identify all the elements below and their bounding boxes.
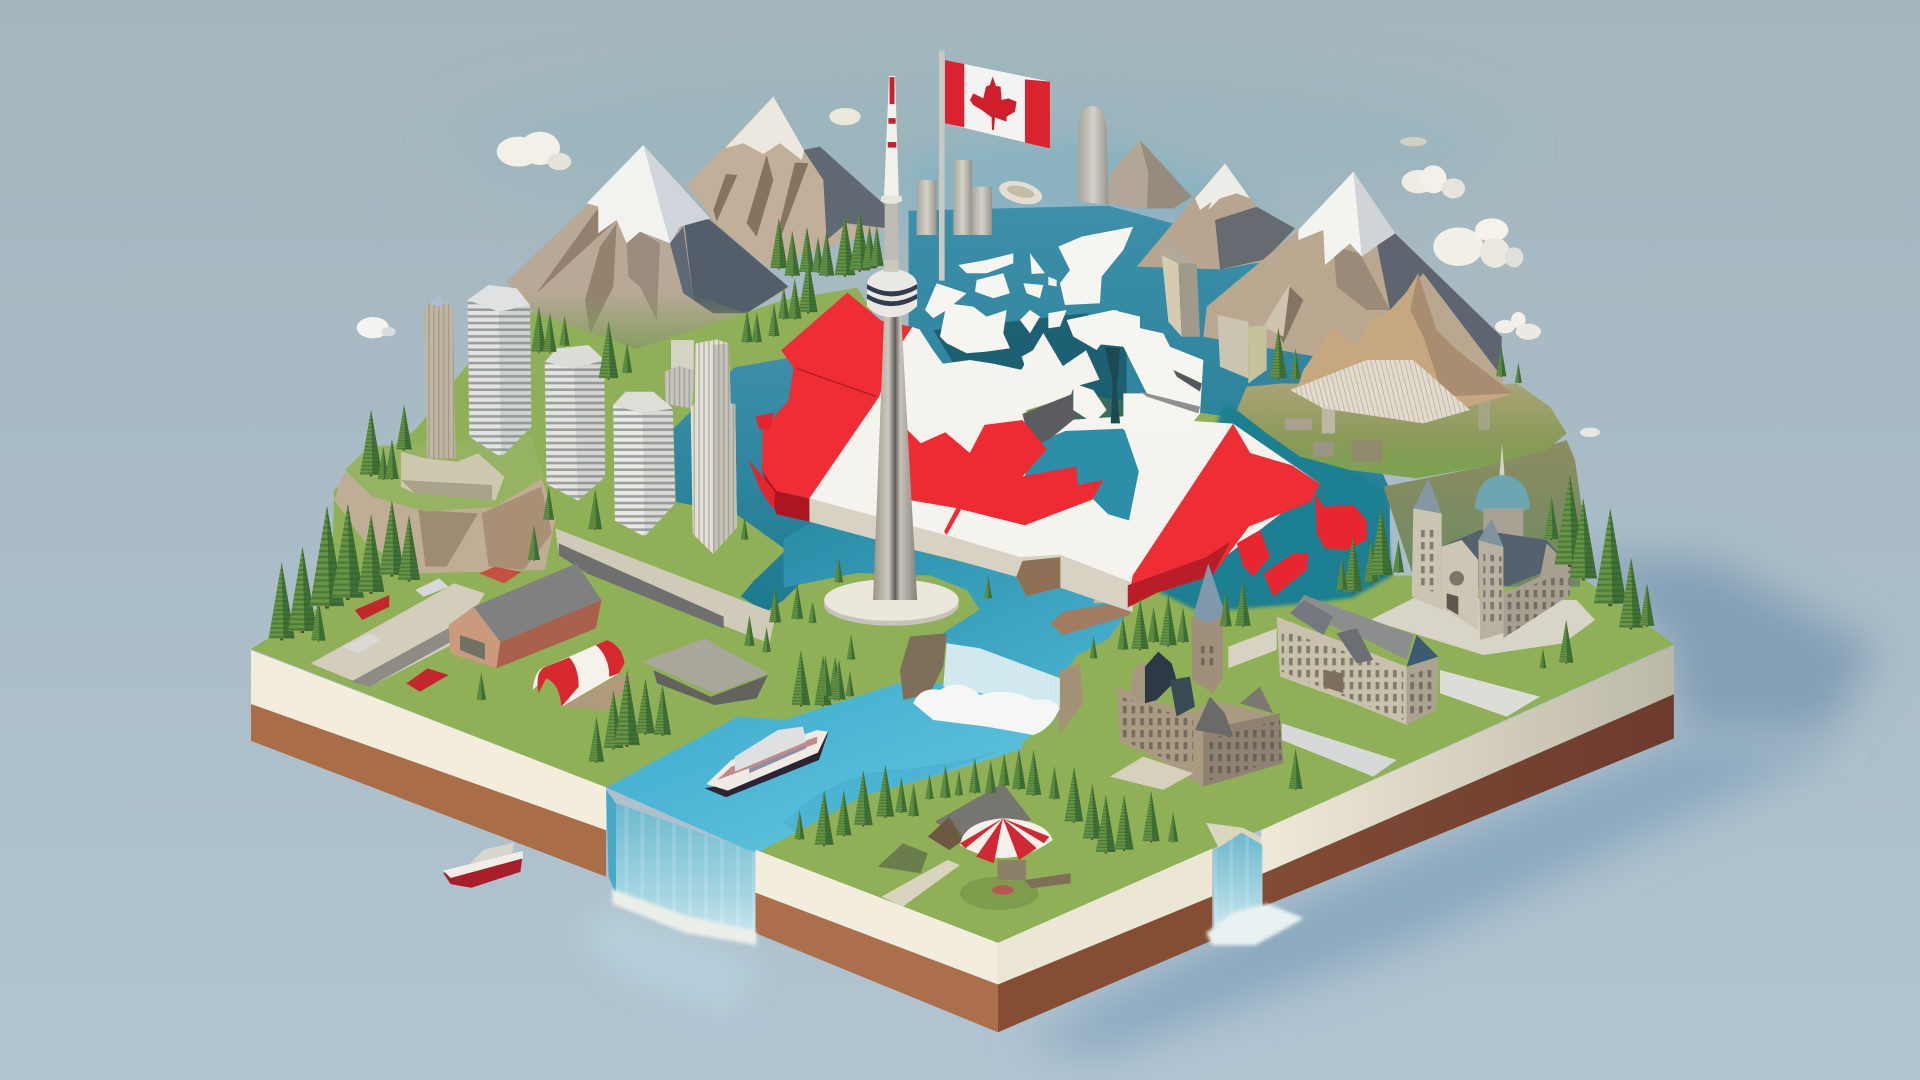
carousel ground xyxy=(960,877,1039,910)
shadow band in the lake xyxy=(784,747,1010,833)
cloud: upper right xyxy=(1402,165,1465,198)
skyscraper: white stripes tall xyxy=(468,285,531,457)
platform left cream layer xyxy=(251,650,606,830)
market stalls xyxy=(878,843,1071,895)
platform right cream layer xyxy=(998,849,1212,984)
west beige road xyxy=(311,583,485,687)
left city towers xyxy=(401,285,737,554)
barn building xyxy=(449,563,602,668)
carousel and pavilion xyxy=(878,783,1071,910)
wooden pavilion xyxy=(928,783,1031,850)
cruise ship xyxy=(705,727,829,797)
mountain: rocky foreground east xyxy=(1290,273,1513,423)
baffin island xyxy=(1070,310,1203,430)
platform left brown layer xyxy=(251,704,606,877)
grey terminal building xyxy=(642,638,768,705)
mountain: north west xyxy=(507,145,788,357)
map body white xyxy=(809,327,1320,583)
walking path xyxy=(881,860,960,907)
skyscraper: white stripes short xyxy=(613,392,675,537)
map east red band xyxy=(1128,424,1320,607)
mountain: north east xyxy=(1137,163,1295,269)
tower: beige midrise xyxy=(1162,238,1200,337)
tower antenna xyxy=(884,76,899,196)
tower pod xyxy=(867,260,917,317)
skyscraper: white stripes mid xyxy=(545,345,605,501)
front steps xyxy=(1110,757,1193,790)
dark roofs xyxy=(1130,652,1273,737)
arctic islands xyxy=(925,227,1140,423)
nave facade xyxy=(1442,540,1478,630)
waterfall: front centre xyxy=(606,790,757,945)
west side buildings xyxy=(343,563,768,710)
carousel canopy xyxy=(960,818,1053,880)
domed midrise xyxy=(664,340,695,408)
icon: maple leaf xyxy=(970,77,1017,130)
dome xyxy=(1475,475,1530,515)
cathedral plaza xyxy=(1370,598,1595,655)
left tower xyxy=(1412,478,1442,610)
clock tower xyxy=(1192,563,1226,693)
cloud: right large xyxy=(1433,218,1523,268)
finial xyxy=(1499,443,1505,477)
cloud: upper left xyxy=(497,132,571,170)
drum xyxy=(1483,508,1523,545)
reflection below the front waterfall xyxy=(576,906,757,1016)
snow cap xyxy=(725,97,804,160)
map side extrusion xyxy=(809,498,1133,612)
haze behind the mountains xyxy=(453,61,1506,233)
east roads xyxy=(1228,628,1540,777)
mountain: east large xyxy=(1203,172,1503,390)
atlantic islands red xyxy=(1237,493,1367,597)
tower: rounded skyscraper xyxy=(1078,106,1109,205)
sand beside tent xyxy=(561,675,634,710)
platform xyxy=(251,645,1674,1032)
falling water xyxy=(943,643,1060,707)
dark east face xyxy=(683,215,788,313)
right wing xyxy=(1503,543,1570,638)
west river beside map xyxy=(673,356,814,612)
skyscraper: ribbed tower by river xyxy=(691,339,737,554)
waterfall: central with cliff xyxy=(900,633,1083,735)
foam xyxy=(913,684,1060,735)
central rivers xyxy=(606,356,1133,853)
tan village blocks xyxy=(1285,393,1490,462)
tower: low beige pair xyxy=(1217,315,1267,383)
Canada map with flag colours xyxy=(748,227,1367,612)
platform far right cream layer xyxy=(1261,645,1674,874)
rock cliff left xyxy=(900,633,947,700)
platform right brown layer xyxy=(998,896,1212,1032)
cloud: far left xyxy=(357,317,396,338)
snow cap xyxy=(587,145,710,243)
map hudson bay xyxy=(1022,394,1139,520)
east bay xyxy=(1151,404,1392,612)
distant boat xyxy=(997,177,1045,208)
map maple leaf xyxy=(905,420,1103,535)
cloud: tiny right xyxy=(1580,428,1600,437)
hill: right plateau xyxy=(1237,383,1567,478)
skyscraper: slim beige xyxy=(424,293,456,458)
waterfall: front right xyxy=(1206,833,1304,945)
platform centre cream layer xyxy=(756,850,998,984)
rock cliff right xyxy=(1057,663,1083,733)
snow cap xyxy=(1298,172,1395,265)
CN Tower xyxy=(824,76,959,626)
dark east face xyxy=(803,147,887,240)
chateau building xyxy=(1277,595,1438,725)
cloud: far top right xyxy=(1400,137,1427,146)
cloud: right small xyxy=(1495,312,1541,340)
map west red band xyxy=(748,293,912,509)
wooden dock xyxy=(1050,593,1133,635)
forest trees xyxy=(269,210,1654,853)
right stream notch xyxy=(1206,823,1262,855)
distant city towers xyxy=(917,106,1109,235)
platform far right brown layer xyxy=(1261,694,1674,907)
roof xyxy=(1442,530,1567,587)
cast shadows on the water xyxy=(1022,557,1880,1053)
upper mast xyxy=(880,196,902,276)
tower base disc xyxy=(824,579,959,626)
small red boat xyxy=(443,842,523,888)
riverside road xyxy=(555,528,776,643)
podium plaza xyxy=(401,452,504,500)
back water xyxy=(906,132,1390,612)
mountain: north centre xyxy=(687,97,887,267)
main land surface xyxy=(251,288,1674,943)
mountain: far right small xyxy=(1108,140,1192,208)
centre tower xyxy=(1478,518,1503,640)
island shadows under the arctic xyxy=(933,313,1127,443)
east city towers xyxy=(1162,238,1267,383)
notch in south shore xyxy=(1016,557,1060,596)
left rocky hill xyxy=(334,437,555,573)
clouds xyxy=(357,108,1600,437)
parliament building xyxy=(1110,563,1283,790)
cars xyxy=(343,567,521,692)
roads xyxy=(311,528,1540,777)
platform centre brown layer xyxy=(756,893,998,1032)
cloud: small top xyxy=(829,108,861,125)
white scree slope xyxy=(1290,360,1470,423)
cliff below the right plateau xyxy=(1383,440,1582,587)
east side buildings xyxy=(1110,443,1595,790)
flag: Canada on pole xyxy=(939,51,1050,281)
red white striped tent xyxy=(533,640,625,707)
river below the map xyxy=(784,520,1133,677)
lower lake xyxy=(606,680,1060,853)
tower shaft xyxy=(873,316,917,600)
cathedral with green dome xyxy=(1412,443,1570,640)
